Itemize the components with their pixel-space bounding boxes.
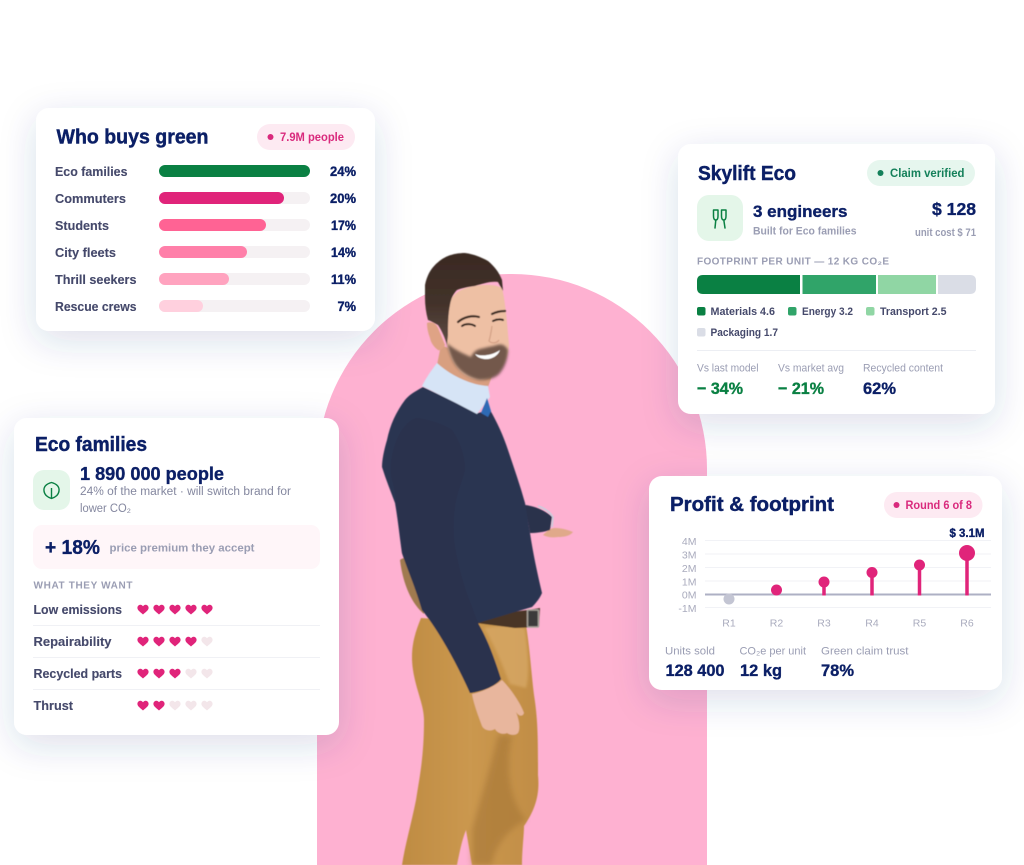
icon: tools <box>697 195 743 241</box>
stat: recycled content <box>863 362 943 398</box>
stat: units sold: Units sold <box>665 646 715 658</box>
rating: low emissions <box>34 602 213 617</box>
heading: Who buys green <box>56 126 208 148</box>
row: rescue crews: 7% <box>338 299 356 314</box>
rating: recycled parts: Recycled parts <box>34 666 122 681</box>
row: city fleets: City fleets <box>55 245 116 260</box>
lollipop chart: R3 <box>817 618 831 630</box>
lollipop chart: 2M <box>682 563 696 575</box>
row: thrill seekers <box>55 272 356 287</box>
row: city fleets <box>55 245 356 260</box>
legend: Transport 2.5 <box>880 306 946 318</box>
legend: Packaging 1.7 <box>710 327 778 339</box>
population note: 24% of the market · will switch brand for <box>80 486 291 498</box>
rating: low emissions: Low emissions <box>34 602 122 617</box>
row: eco families: Eco families <box>55 164 128 179</box>
stat: vs last model: Vs last model <box>697 362 758 374</box>
pink arch backdrop <box>317 274 707 865</box>
stat: vs last model <box>697 362 758 398</box>
stat: co2e per unit <box>740 646 806 680</box>
wants heading: WHAT THEY WANT <box>34 580 132 592</box>
row: students <box>55 218 356 233</box>
panel: profit and footprint <box>649 476 1002 690</box>
stat: vs market avg <box>778 362 844 398</box>
badge: claim verified: Claim verified <box>890 168 964 180</box>
row: thrill seekers: Thrill seekers <box>55 272 136 287</box>
stat: green claim trust <box>821 646 908 680</box>
population note <box>80 486 291 515</box>
panel: who buys green <box>36 108 375 331</box>
price: $ 128 <box>932 199 976 219</box>
badge: population: 7.9M people <box>280 132 344 144</box>
lollipop chart: R4 <box>865 618 879 630</box>
stat: vs market avg: Vs market avg <box>778 362 844 374</box>
row: commuters: Commuters <box>55 191 126 206</box>
stat: units sold: 128 400 <box>666 661 724 680</box>
stacked footprint bar <box>697 275 976 294</box>
footprint heading: FOOTPRINT PER UNIT — 12 KG CO₂E <box>697 256 889 268</box>
rating: thrust: Thrust <box>34 698 74 713</box>
row: rescue crews <box>55 299 356 314</box>
icon: leaf <box>33 470 70 510</box>
lollipop chart: 1M <box>682 576 696 588</box>
stat: co2e per unit: 12 kg <box>740 661 782 680</box>
row: commuters: 20% <box>330 191 356 206</box>
badge: round <box>884 492 982 518</box>
unit cost: unit cost $ 71 <box>915 227 976 239</box>
legend <box>697 306 946 339</box>
badge: round: Round 6 of 8 <box>906 500 973 512</box>
stat: green claim trust: Green claim trust <box>821 646 908 658</box>
lollipop chart: $ 3.1M <box>950 526 985 540</box>
lollipop chart: R6 <box>960 618 974 630</box>
rating: repairability <box>34 634 213 649</box>
heading: Profit & footprint <box>670 493 834 516</box>
rating: repairability: Repairability <box>34 634 112 649</box>
callout: price premium: + 18% <box>45 537 100 559</box>
row: commuters <box>55 191 356 206</box>
lollipop chart: 4M <box>682 536 696 548</box>
stat: recycled content: Recycled content <box>863 362 943 374</box>
team size: 3 engineers <box>753 202 848 221</box>
badge: population <box>257 124 355 150</box>
stat: co2e per unit: CO₂e per unit <box>740 646 806 658</box>
population note: lower CO₂ <box>80 503 131 515</box>
stat: units sold <box>665 646 724 680</box>
heading: Eco families <box>35 433 147 456</box>
rating: thrust <box>34 698 213 713</box>
row: students: 17% <box>331 218 356 233</box>
row: students: Students <box>55 218 109 233</box>
stat: recycled content: 62% <box>863 379 896 398</box>
row: thrill seekers: 11% <box>331 272 356 287</box>
lollipop chart: 3M <box>682 550 696 562</box>
rating: recycled parts <box>34 666 213 681</box>
audience note: Built for Eco families <box>753 226 856 238</box>
callout: price premium <box>33 525 320 569</box>
row: eco families: 24% <box>330 164 356 179</box>
lollipop chart: 0M <box>682 590 696 602</box>
lollipop chart: -1M <box>678 603 696 615</box>
legend: Energy 3.2 <box>802 306 853 318</box>
row: city fleets: 14% <box>331 245 356 260</box>
lollipop chart: R5 <box>913 618 926 630</box>
stat: vs market avg: − 21% <box>778 379 824 398</box>
legend: Materials 4.6 <box>710 306 775 318</box>
lollipop chart: R2 <box>770 618 783 630</box>
heading: Skylift Eco <box>698 162 796 185</box>
row: rescue crews: Rescue crews <box>55 299 136 314</box>
lollipop chart <box>678 526 991 630</box>
row: eco families <box>55 164 356 179</box>
callout: price premium: price premium they accept <box>110 542 255 554</box>
population: 1 890 000 people <box>80 463 224 484</box>
stat: green claim trust: 78% <box>821 661 854 680</box>
panel: skylift eco <box>678 144 995 414</box>
illustration: smiling man presenting <box>382 253 573 865</box>
panel: eco families <box>14 418 339 735</box>
lollipop chart: R1 <box>722 618 736 630</box>
badge: claim verified <box>867 160 975 186</box>
stat: vs last model: − 34% <box>697 379 743 398</box>
